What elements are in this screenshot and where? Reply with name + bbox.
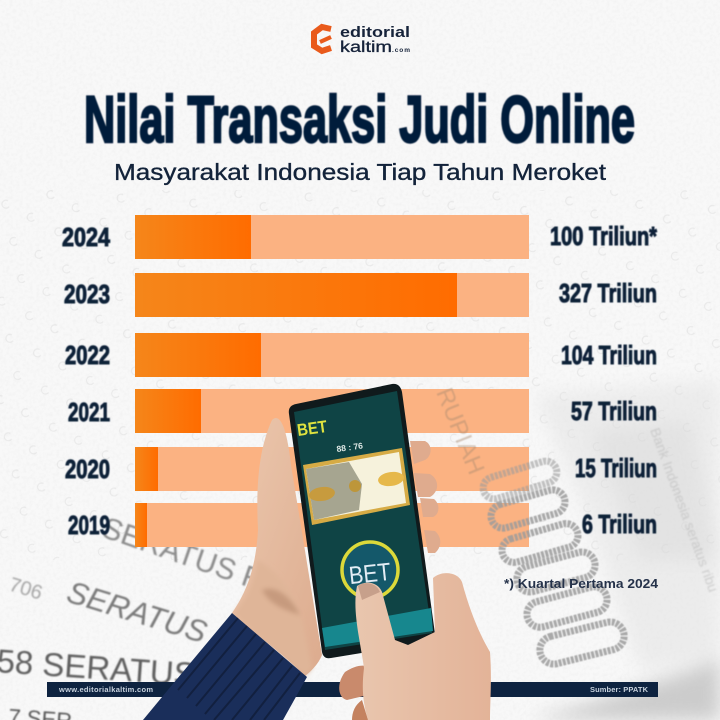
bar 2024 (135, 215, 529, 259)
banknote text: SERATUS (0, 511, 277, 720)
phone screen (294, 391, 432, 650)
bar 2022 (135, 333, 529, 377)
bet button: BET (348, 558, 392, 590)
left fingers (410, 441, 440, 553)
basketball court (303, 448, 410, 525)
label 2023: 2023 (64, 279, 110, 309)
year labels (62, 222, 110, 540)
left hand shade (234, 560, 312, 676)
sleeve ribs (178, 618, 300, 720)
footnote: *) Kuartal Pertama 2024 (504, 577, 658, 591)
phone body (289, 384, 435, 658)
screen header: BET (296, 417, 329, 440)
index finger nail (358, 583, 380, 600)
banknote text: SERATUS: 58 SERATUS (0, 642, 197, 693)
label 2021: 2021 (68, 397, 110, 427)
value labels (550, 221, 658, 539)
illustration: hands holding phone (143, 384, 491, 720)
bet button (342, 542, 398, 598)
phone (289, 384, 435, 658)
value 2024: 100 Triliun* (550, 221, 658, 251)
banknote text: SERATUS: SERATUS (63, 574, 211, 650)
palm crease (262, 589, 300, 615)
banknote background right (530, 380, 720, 720)
logo (314, 24, 410, 56)
bar 2020 (135, 447, 529, 491)
value 2023: 327 Triliun (559, 278, 657, 308)
logo: .com (392, 47, 410, 54)
bar 2019 (135, 503, 529, 547)
banknote text: SERATUS: SERATUS RI (98, 511, 277, 601)
value 2021: 57 Triliun (571, 396, 657, 426)
value 2020: 15 Triliun (575, 453, 657, 483)
banknote small lettering: Bank Indonesia seratus ribu (647, 426, 720, 594)
lower finger of right hand (352, 700, 368, 720)
label 2022: 2022 (65, 340, 110, 370)
logo: kaltim (340, 39, 392, 56)
value 2022: 104 Triliun (561, 340, 657, 370)
icon: logo hexagon e (314, 27, 331, 51)
sleeve (143, 613, 307, 720)
website: www.editorialkaltim.com (58, 685, 153, 694)
timer: 88 : 76 (336, 440, 364, 454)
bar 2021 (135, 389, 529, 433)
teal strip (322, 608, 433, 647)
right hand (355, 573, 491, 720)
left hand (232, 418, 322, 676)
banknote text: SERATUS: 706 (7, 574, 45, 605)
label 2020: 2020 (65, 454, 110, 484)
banknote numerals 100000 (480, 458, 627, 667)
banknote RUPIAH over bars: RUPIAH (430, 384, 489, 478)
value 2019: 6 Triliun (582, 509, 657, 539)
subtitle: Masyarakat Indonesia Tiap Tahun Meroket (114, 159, 607, 185)
bar chart (135, 215, 529, 547)
source: Sumber: PPATK (590, 685, 649, 694)
label 2024: 2024 (62, 222, 110, 252)
lower left finger behind phone (339, 666, 378, 700)
bar 2023 (135, 273, 529, 317)
footer bar (47, 682, 658, 697)
logo wordmark: editorial (340, 24, 410, 41)
label 2019: 2019 (68, 510, 110, 540)
